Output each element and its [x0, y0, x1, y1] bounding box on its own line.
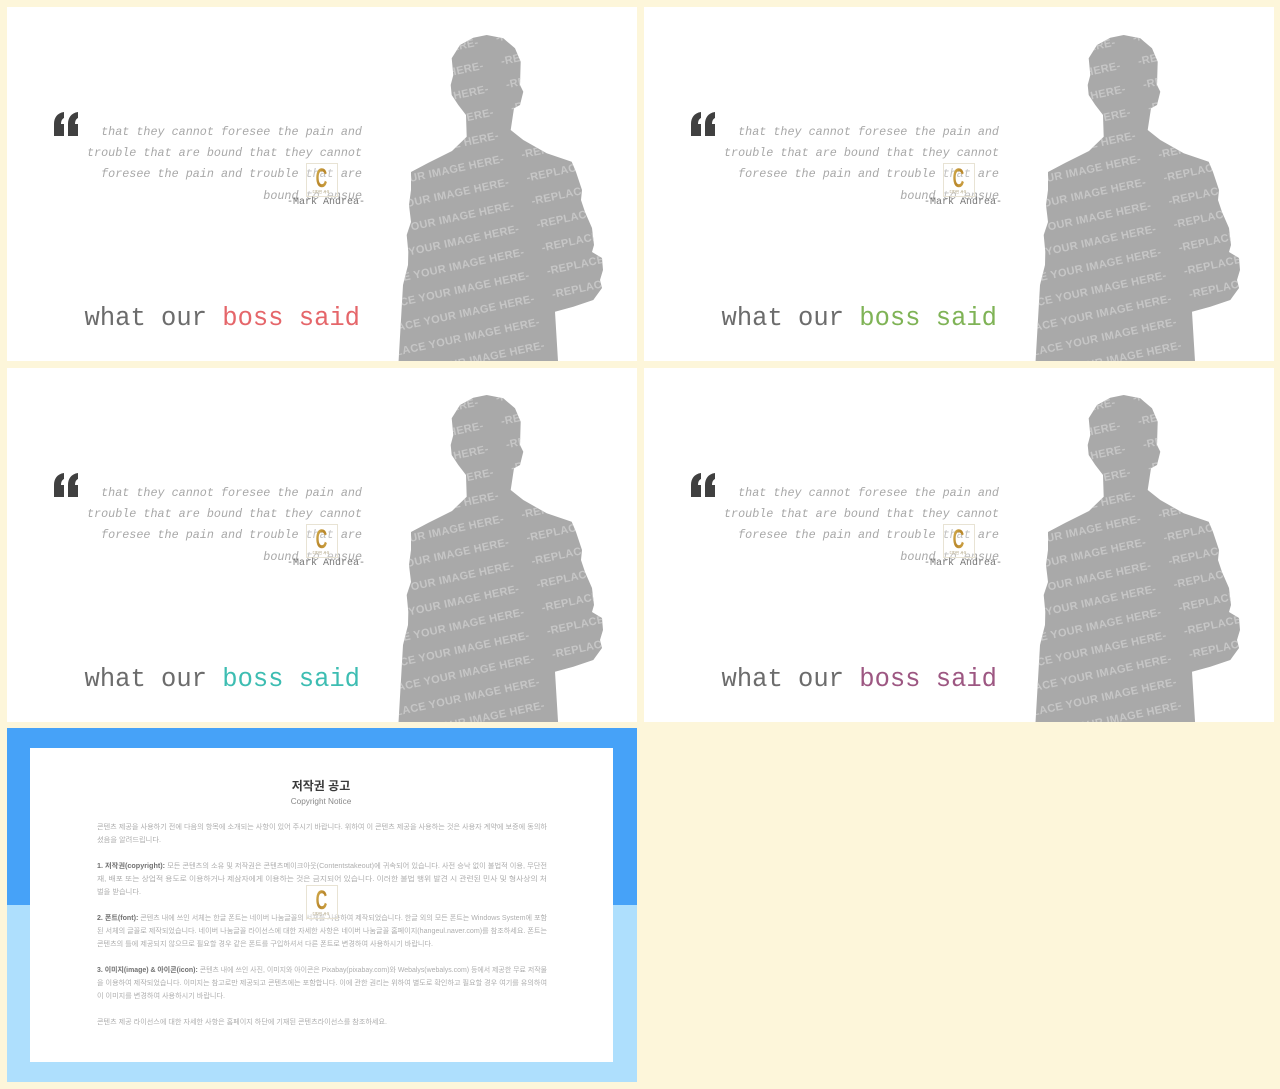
image placeholder: man silhouette: -REPLACE YOUR IMAGE HERE-: [974, 176, 1147, 225]
quote text: [87, 486, 363, 564]
image placeholder: man silhouette: -REPLACE: [515, 114, 575, 138]
image placeholder: man silhouette: -REPLACE: [510, 91, 570, 115]
image placeholder: man silhouette: -REPLACE YOUR IMAGE HERE-: [999, 653, 1173, 701]
image placeholder: man silhouette: -REPLACE YOUR IMAGE HERE-: [311, 420, 485, 468]
image placeholder: man silhouette: -REPLACE: [551, 637, 611, 661]
image placeholder: man silhouette: -REPLACE: [536, 567, 595, 591]
image placeholder: man silhouette: [1036, 395, 1240, 722]
image placeholder: man silhouette: -REPLACE YOUR IMAGE HERE-: [964, 130, 1137, 178]
image placeholder: man silhouette: -REPLACE: [1188, 637, 1248, 661]
section 2: font: [97, 913, 548, 948]
image placeholder: man silhouette: -REPLACE: [556, 300, 616, 324]
panel: boss quote red: [7, 7, 637, 361]
closing text: 콘텐츠 제공 라이선스에 대한 자세한 사항은 홈페이지 하단에 기재된 콘텐츠라이선스를 참조하세요.: [97, 1017, 387, 1026]
logo watermark: [944, 163, 974, 196]
quote text: that they cannot foresee the pain and: [738, 486, 1000, 500]
logo watermark: C: [953, 524, 964, 554]
logo watermark: 디자인 서식: [949, 550, 967, 555]
image placeholder: man silhouette: -REPLACE: [561, 324, 621, 348]
image placeholder: man silhouette: -REPLACE: [505, 427, 565, 451]
quote attribution: -Mark Andrea-: [924, 196, 1002, 208]
image placeholder: man silhouette: -REPLACE: [1198, 684, 1258, 708]
image placeholder: man silhouette: -REPLACE YOUR IMAGE HERE-: [948, 60, 1122, 108]
image placeholder: man silhouette: -REPLACE YOUR IMAGE HERE-: [994, 630, 1168, 678]
image placeholder: man silhouette: -REPLACE: [556, 660, 616, 684]
quote text: trouble that are bound that they cannot: [724, 507, 999, 521]
section 3: image and icon: 을 이용하여 제작되었습니다. 이미지는 참고로만 제공되고 콘텐츠에는 포함합니다. 이에 관한 권리는 위하여 별도로 확인하고 필요할 경우 여기를 유의하여: [97, 978, 547, 987]
logo watermark: C: [316, 524, 327, 554]
image placeholder: man silhouette: -REPLACE: [1152, 114, 1212, 138]
image placeholder: man silhouette: -REPLACE: [1178, 590, 1237, 614]
image placeholder: man silhouette: -REPLACE YOUR IMAGE HERE-: [337, 536, 510, 585]
logo watermark: [306, 885, 338, 918]
image placeholder: man silhouette: -REPLACE: [1198, 324, 1258, 348]
image placeholder: man silhouette: -REPLACE YOUR IMAGE HERE-: [964, 490, 1137, 538]
section 1: copyright: 벌을 받습니다.: [97, 887, 141, 896]
image placeholder: man silhouette: -REPLACE YOUR IMAGE HERE-: [337, 176, 510, 225]
image placeholder: man silhouette: -REPLACE: [1157, 497, 1217, 521]
image placeholder: man silhouette: -REPLACE YOUR IMAGE HERE-: [316, 443, 490, 491]
intro text: [97, 822, 548, 844]
image placeholder: man silhouette: -REPLACE YOUR IMAGE HERE-: [362, 293, 536, 341]
intro text: 셨음을 알려드립니다.: [97, 835, 161, 844]
image placeholder: man silhouette: -REPLACE: [1183, 614, 1243, 638]
image placeholder: man silhouette: -REPLACE: [546, 614, 606, 638]
image placeholder: man silhouette: -REPLACE: [520, 137, 580, 161]
image placeholder: man silhouette: -REPLACE: [541, 230, 600, 254]
image placeholder: man silhouette: -REPLACE YOUR IMAGE HERE-: [948, 420, 1122, 468]
panel: copyright notice: [7, 728, 637, 1082]
notice card: [30, 748, 613, 1062]
logo watermark: C: [316, 885, 327, 915]
quote text: bound to ensue: [263, 189, 362, 203]
image placeholder: man silhouette: -REPLACE YOUR IMAGE HERE-: [984, 223, 1157, 271]
image placeholder: man silhouette: -REPLACE YOUR IMAGE HERE-: [316, 83, 490, 131]
image placeholder: man silhouette: -REPLACE: [546, 254, 606, 278]
quote text: [87, 125, 363, 203]
image placeholder: man silhouette: -REPLACE: [1137, 44, 1197, 68]
image placeholder: man silhouette: -REPLACE: [1142, 67, 1202, 91]
image placeholder: man silhouette: -REPLACE: [1162, 521, 1222, 544]
image placeholder: man silhouette: -REPLACE: [495, 381, 555, 405]
image placeholder: man silhouette: -REPLACE: [1132, 21, 1192, 45]
heading: what our boss said: [85, 665, 360, 694]
image placeholder: man silhouette: -REPLACE: [1147, 91, 1207, 115]
quote text: foresee the pain and trouble that are: [101, 167, 362, 181]
panel: boss quote green: [644, 7, 1274, 361]
quote text: foresee the pain and trouble that are: [738, 167, 999, 181]
image placeholder: man silhouette: -REPLACE YOUR IMAGE HERE-: [994, 270, 1168, 318]
image placeholder: man silhouette: -REPLACE: [561, 684, 621, 708]
quote text: foresee the pain and trouble that are: [738, 528, 999, 542]
image placeholder: man silhouette: -REPLACE: [551, 277, 611, 301]
image placeholder: man silhouette: -REPLACE: [1147, 451, 1207, 475]
image placeholder: man silhouette: -REPLACE YOUR IMAGE HERE-: [321, 467, 495, 515]
image placeholder: man silhouette: -REPLACE YOUR IMAGE HERE-: [327, 130, 500, 178]
image placeholder: man silhouette: -REPLACE: [525, 161, 585, 184]
image placeholder: man silhouette: -REPLACE YOUR IMAGE HERE-: [979, 200, 1152, 248]
image placeholder: man silhouette: -REPLACE YOUR IMAGE HERE-: [958, 467, 1132, 515]
quote text: bound to ensue: [900, 550, 999, 564]
image placeholder: man silhouette: -REPLACE YOUR IMAGE HERE-: [969, 153, 1142, 201]
section 2: font: 콘텐츠의 틀에 제공되지 않으므로 필요할 경우 같은 폰트를 구입하셔서 다른 폰트로 변경하여 사용하시기 바랍니다.: [97, 939, 433, 948]
image placeholder: man silhouette: -REPLACE YOUR IMAGE HERE-: [943, 397, 1117, 445]
image placeholder: man silhouette: -REPLACE YOUR IMAGE HERE-: [347, 583, 520, 631]
quote text: trouble that are bound that they cannot: [87, 146, 362, 160]
image placeholder: man silhouette: -REPLACE: [1157, 137, 1217, 161]
image placeholder: man silhouette: -REPLACE: [536, 207, 595, 231]
image placeholder: man silhouette: -REPLACE YOUR IMAGE HERE-: [953, 83, 1127, 131]
image placeholder: man silhouette: -REPLACE: [505, 67, 565, 91]
section 2: font: 2. 폰트(font): 콘텐츠 내에 쓰인 서체는 한글 폰트는 네이버 나눔글꼴의 서체를 사용하여 제작되었습니다. 한글 외의 모든 폰트는 Windows System에 포함: [97, 913, 548, 922]
image placeholder: man silhouette: -REPLACE: [1167, 184, 1227, 208]
heading: what our boss said: [85, 304, 360, 333]
logo watermark: 디자인 서식: [312, 911, 330, 916]
section 2: font: 된 서체의 글꼴로 제작되었습니다. 네이버 나눔글꼴 라이선스에 대한 자세한 사항은 네이버 나눔글꼴 홈페이지(hangeul.naver.com)를 참조하세요. 폰트는: [97, 926, 548, 935]
image placeholder: man silhouette: -REPLACE: [1132, 381, 1192, 405]
icon: quotation mark: [691, 473, 715, 497]
image placeholder: man silhouette: -REPLACE YOUR IMAGE HERE-: [999, 293, 1173, 341]
quote text: that they cannot foresee the pain and: [101, 486, 363, 500]
quote attribution: -Mark Andrea-: [287, 557, 365, 569]
image placeholder: man silhouette: -REPLACE: [1183, 254, 1243, 278]
image placeholder: man silhouette: -REPLACE YOUR IMAGE HERE-: [306, 397, 480, 445]
image placeholder: man silhouette: -REPLACE: [1173, 207, 1232, 231]
image placeholder: man silhouette: -REPLACE: [541, 590, 600, 614]
icon: quotation mark: [691, 112, 715, 136]
image placeholder: man silhouette: -REPLACE: [1142, 427, 1202, 451]
image placeholder: man silhouette: -REPLACE YOUR IMAGE HERE-: [943, 37, 1117, 85]
image placeholder: man silhouette: -REPLACE YOUR IMAGE HERE-: [342, 560, 515, 608]
image placeholder: man silhouette: -REPLACE YOUR IMAGE HERE-: [327, 490, 500, 538]
image placeholder: man silhouette: -REPLACE YOUR IMAGE HERE-: [347, 223, 520, 271]
image placeholder: man silhouette: -REPLACE: [1188, 277, 1248, 301]
image placeholder: man silhouette: -REPLACE YOUR IMAGE HERE-: [953, 443, 1127, 491]
image placeholder: man silhouette: -REPLACE YOUR IMAGE HERE-: [362, 653, 536, 701]
image placeholder: man silhouette: -REPLACE YOUR IMAGE HERE-: [357, 630, 531, 678]
image placeholder: man silhouette: -REPLACE YOUR IMAGE HERE-: [311, 60, 485, 108]
icon: quotation mark: [54, 112, 78, 136]
image placeholder: man silhouette: -REPLACE YOUR IMAGE HERE-: [989, 606, 1163, 654]
quote text: trouble that are bound that they cannot: [87, 507, 362, 521]
image placeholder: man silhouette: -REPLACE: [1193, 660, 1253, 684]
icon: quotation mark: [54, 473, 78, 497]
image placeholder: man silhouette: -REPLACE: [510, 451, 570, 475]
image placeholder: man silhouette: -REPLACE: [530, 544, 590, 568]
image placeholder: man silhouette: -REPLACE YOUR IMAGE HERE-: [342, 200, 515, 248]
quote text: bound to ensue: [900, 189, 999, 203]
logo watermark: [306, 163, 338, 196]
image placeholder: man silhouette: -REPLACE: [1178, 230, 1237, 254]
quote text: trouble that are bound that they cannot: [724, 146, 999, 160]
image placeholder: man silhouette: -REPLACE: [525, 521, 585, 544]
image placeholder: man silhouette: -REPLACE YOUR IMAGE HERE-: [989, 246, 1163, 294]
quote text: [724, 125, 1000, 203]
heading: what our boss said: [722, 665, 997, 694]
panel: boss quote purple: [644, 368, 1274, 722]
quote attribution: -Mark Andrea-: [924, 557, 1002, 569]
image placeholder: man silhouette: -REPLACE: [1137, 404, 1197, 428]
image placeholder: man silhouette: -REPLACE: [520, 497, 580, 521]
notice title: 저작권 공고: [292, 778, 350, 793]
logo watermark: C: [316, 163, 327, 193]
image placeholder: man silhouette: [1036, 35, 1240, 361]
image placeholder: man silhouette: -REPLACE YOUR IMAGE HERE-: [321, 107, 495, 155]
image placeholder: man silhouette: -REPLACE YOUR IMAGE HERE-: [332, 153, 505, 201]
image placeholder: man silhouette: -REPLACE YOUR IMAGE HERE-: [332, 513, 505, 561]
heading: what our boss said: [722, 304, 997, 333]
section 3: image and icon: 이 이미지를 변경하여 사용하시기 바랍니다.: [97, 991, 225, 1000]
image placeholder: man silhouette: [398, 395, 603, 722]
logo watermark: 디자인 서식: [312, 189, 330, 194]
image placeholder: man silhouette: -REPLACE: [1167, 544, 1227, 568]
image placeholder: man silhouette: -REPLACE YOUR IMAGE HERE-: [352, 606, 526, 654]
logo watermark: [944, 524, 974, 558]
image placeholder: man silhouette: -REPLACE: [500, 404, 560, 428]
image placeholder: man silhouette: -REPLACE YOUR IMAGE HERE-: [306, 37, 480, 85]
quote text: [724, 486, 1000, 564]
image placeholder: man silhouette: -REPLACE YOUR IMAGE HERE-: [979, 560, 1152, 608]
section 1: copyright: [97, 861, 547, 896]
panel: boss quote teal: [7, 368, 637, 722]
image placeholder: man silhouette: -REPLACE YOUR IMAGE HERE-: [984, 583, 1157, 631]
image placeholder: man silhouette: -REPLACE: [500, 44, 560, 68]
image placeholder: man silhouette: [398, 35, 603, 361]
section 1: copyright: 재, 배포 또는 상업적 용도로 이용하거나 제삼자에게 이용하는 것은 금지되어 있습니다. 이러한 불법 행위 발견 시 관련된 민사 및 형사상의 처: [97, 874, 547, 883]
logo watermark: C: [953, 163, 964, 193]
logo watermark: 디자인 서식: [312, 550, 330, 555]
quote text: that they cannot foresee the pain and: [738, 125, 1000, 139]
section 1: copyright: 1. 저작권(copyright): 모든 콘텐츠의 소유 및 저작권은 콘텐츠메이크아웃(Contentstakeout)에 귀속되어 있습니다. 사전 승낙 없이 불법적 이용, 무단전: [97, 861, 547, 870]
quote text: bound to ensue: [263, 550, 362, 564]
image placeholder: man silhouette: -REPLACE: [1173, 567, 1232, 591]
image placeholder: man silhouette: -REPLACE: [1152, 474, 1212, 498]
image placeholder: man silhouette: -REPLACE: [515, 474, 575, 498]
quote text: that they cannot foresee the pain and: [101, 125, 363, 139]
section 3: image and icon: 3. 이미지(image) & 아이콘(icon): 콘텐츠 내에 쓰인 사진, 이미지와 아이콘은 Pixabay(pixabay.com)와 Webalys(webalys.com) 등에서 제공한 무료 저작물: [97, 965, 548, 974]
image placeholder: man silhouette: -REPLACE: [495, 21, 555, 45]
intro text: 콘텐츠 제공을 사용하기 전에 다음의 항목에 소개되는 사항이 있어 주시기 바랍니다. 위하여 이 콘텐츠 제공을 사용하는 것은 사용자 계약에 보증에 동의하: [97, 822, 548, 831]
image placeholder: man silhouette: -REPLACE YOUR IMAGE HERE-: [352, 246, 526, 294]
quote attribution: -Mark Andrea-: [287, 196, 365, 208]
image placeholder: man silhouette: -REPLACE YOUR IMAGE HERE-: [974, 536, 1147, 585]
notice subtitle: Copyright Notice: [291, 797, 352, 806]
image placeholder: man silhouette: -REPLACE: [1162, 161, 1222, 184]
image placeholder: man silhouette: -REPLACE YOUR IMAGE HERE-: [958, 107, 1132, 155]
image placeholder: man silhouette: -REPLACE YOUR IMAGE HERE-: [969, 513, 1142, 561]
logo watermark: [306, 524, 338, 558]
section 3: image and icon: [97, 965, 548, 1000]
image placeholder: man silhouette: -REPLACE: [530, 184, 590, 208]
logo watermark: 디자인 서식: [949, 189, 967, 194]
image placeholder: man silhouette: -REPLACE: [1193, 300, 1253, 324]
image placeholder: man silhouette: -REPLACE YOUR IMAGE HERE-: [357, 270, 531, 318]
quote text: foresee the pain and trouble that are: [101, 528, 362, 542]
